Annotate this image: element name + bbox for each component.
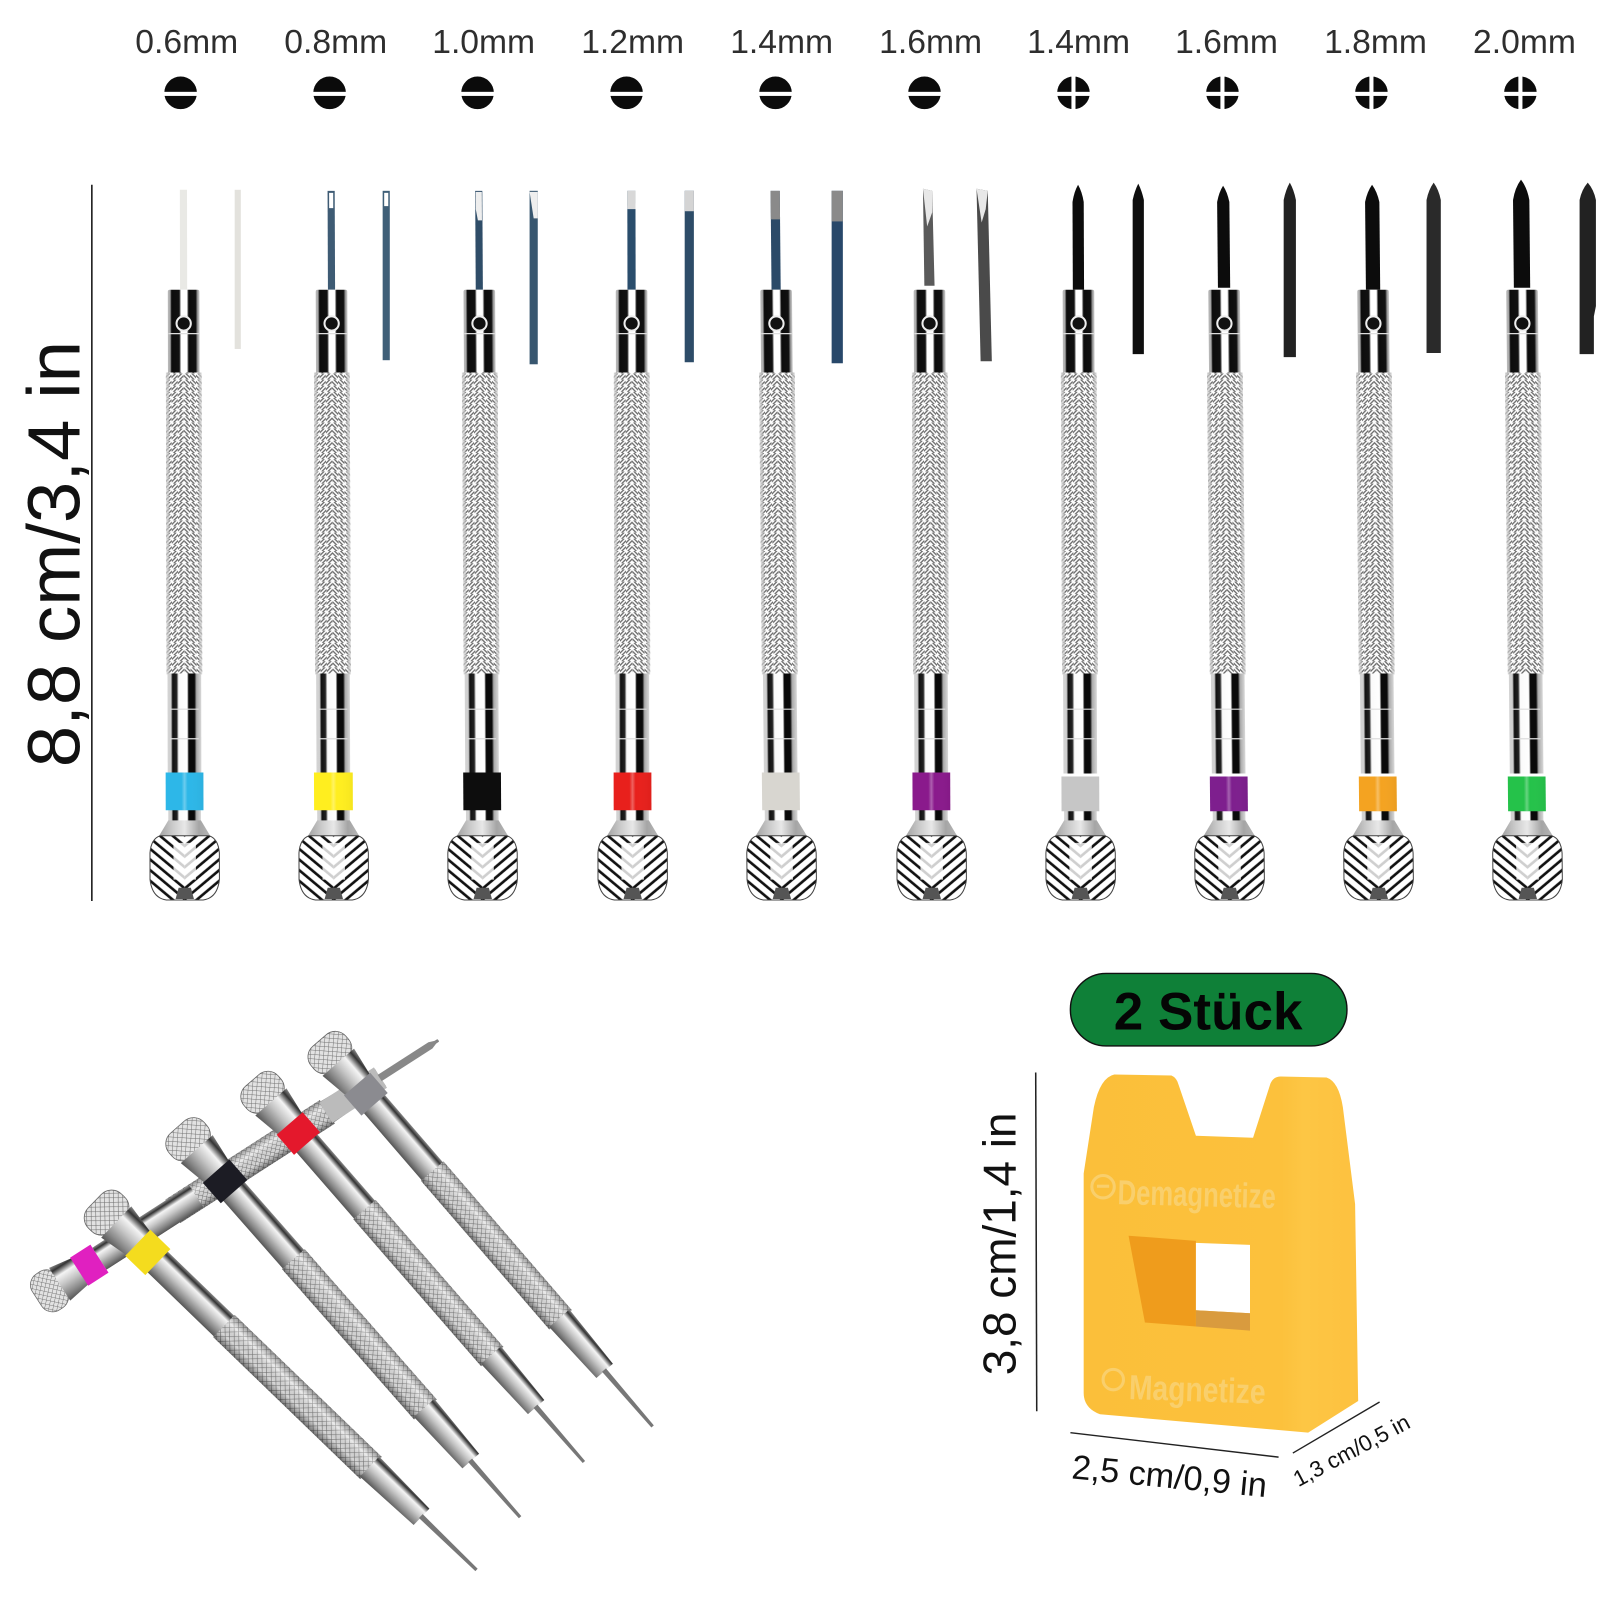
- icon: slotted screw 1.6mm: [906, 77, 943, 109]
- magnetizer window: lower ledge: [1196, 1310, 1250, 1331]
- label 1.6mm phillips: 1.6mm: [1175, 24, 1278, 61]
- height dimension: tool length: 8,8 cm/3,4 in: [13, 341, 96, 767]
- screwdriver grey band: [302, 1026, 670, 1441]
- spare bit 1.8mm phillips: [1427, 183, 1441, 353]
- icon: slotted screw 0.6mm: [162, 77, 199, 109]
- magnetizer window: opening: [1196, 1243, 1250, 1313]
- width dimension: magnetizer: 2,5 cm/0,9 in: [1070, 1449, 1269, 1505]
- label 1.6mm slotted: 1.6mm: [879, 24, 982, 61]
- size labels row: [135, 24, 1576, 61]
- photo: five screwdrivers fanned out: [25, 1022, 670, 1587]
- screwdriver 0.6mm cyan: [149, 190, 219, 900]
- spare bit 1.2mm: [685, 191, 694, 362]
- back screwdriver magenta: [25, 1022, 451, 1317]
- label 1.2mm: 1.2mm: [581, 24, 684, 61]
- spare bit 1.0mm: [530, 191, 538, 364]
- label 0.6mm: 0.6mm: [135, 24, 238, 61]
- screwdriver 1.6mm purple: [894, 189, 966, 900]
- embossed text: Magnetize: [1103, 1369, 1266, 1412]
- screwdriver red band: [235, 1066, 601, 1477]
- icon: phillips screw 1.4mm: [1055, 74, 1092, 111]
- screwdriver 2.0mm phillips green: [1486, 180, 1563, 900]
- screwdriver 1.8mm phillips orange: [1337, 185, 1414, 900]
- label 0.8mm: 0.8mm: [284, 24, 387, 61]
- screwdriver 1.4mm phillips silver: [1043, 185, 1115, 900]
- label 1.8mm: 1.8mm: [1324, 24, 1427, 61]
- screwdriver black band: [160, 1112, 538, 1533]
- screwdriver 0.8mm yellow: [296, 191, 369, 900]
- embossed text: Demagnetize: [1092, 1174, 1276, 1216]
- label 1.4mm slotted: 1.4mm: [730, 24, 833, 61]
- quantity badge: 2 Stück: [1114, 983, 1303, 1042]
- spare bits row: [235, 183, 1596, 364]
- embossed text: Magnetize: Magnetize: [1128, 1369, 1266, 1412]
- label 2.0mm: 2.0mm: [1473, 24, 1576, 61]
- magnetizer window: inner orange wall: [1129, 1236, 1196, 1327]
- spare bit 1.4mm phillips: [1133, 184, 1144, 354]
- screwdriver yellow band: [78, 1184, 493, 1587]
- icon: slotted screw 1.0mm: [459, 77, 496, 109]
- icon: slotted screw 1.4mm: [757, 77, 794, 109]
- icon: phillips screw 1.6mm: [1204, 74, 1241, 111]
- spare bit 1.4mm: [832, 191, 843, 363]
- spare bit 0.6mm: [235, 190, 241, 349]
- label 1.4mm phillips: 1.4mm: [1027, 24, 1130, 61]
- screw head icons row: [162, 74, 1539, 111]
- depth dimension: magnetizer: 1,3 cm/0,5 in: [1289, 1409, 1414, 1492]
- embossed text: Demagnetize: Demagnetize: [1117, 1174, 1276, 1216]
- label 1.0mm: 1.0mm: [432, 24, 535, 61]
- icon: slotted screw 0.8mm: [311, 77, 348, 109]
- height dimension: magnetizer: 3,8 cm/1,4 in: [973, 1112, 1025, 1375]
- screwdriver 1.0mm black: [444, 191, 517, 900]
- spare bit 2.0mm phillips: [1580, 183, 1596, 354]
- icon: slotted screw 1.2mm: [608, 77, 645, 109]
- screwdriver 1.4mm grey: [740, 191, 817, 900]
- quantity badge: [1070, 973, 1347, 1046]
- icon: phillips screw 2.0mm: [1502, 74, 1539, 111]
- spare bit 1.6mm phillips: [1284, 183, 1296, 357]
- spare bit 1.6mm: [977, 189, 992, 361]
- screwdriver 1.2mm red: [597, 191, 667, 900]
- screwdriver 1.6mm phillips purple: [1188, 186, 1265, 900]
- magnetizer block: [1084, 1074, 1358, 1433]
- spare bit 0.8mm: [383, 191, 390, 360]
- icon: phillips screw 1.8mm: [1353, 74, 1390, 111]
